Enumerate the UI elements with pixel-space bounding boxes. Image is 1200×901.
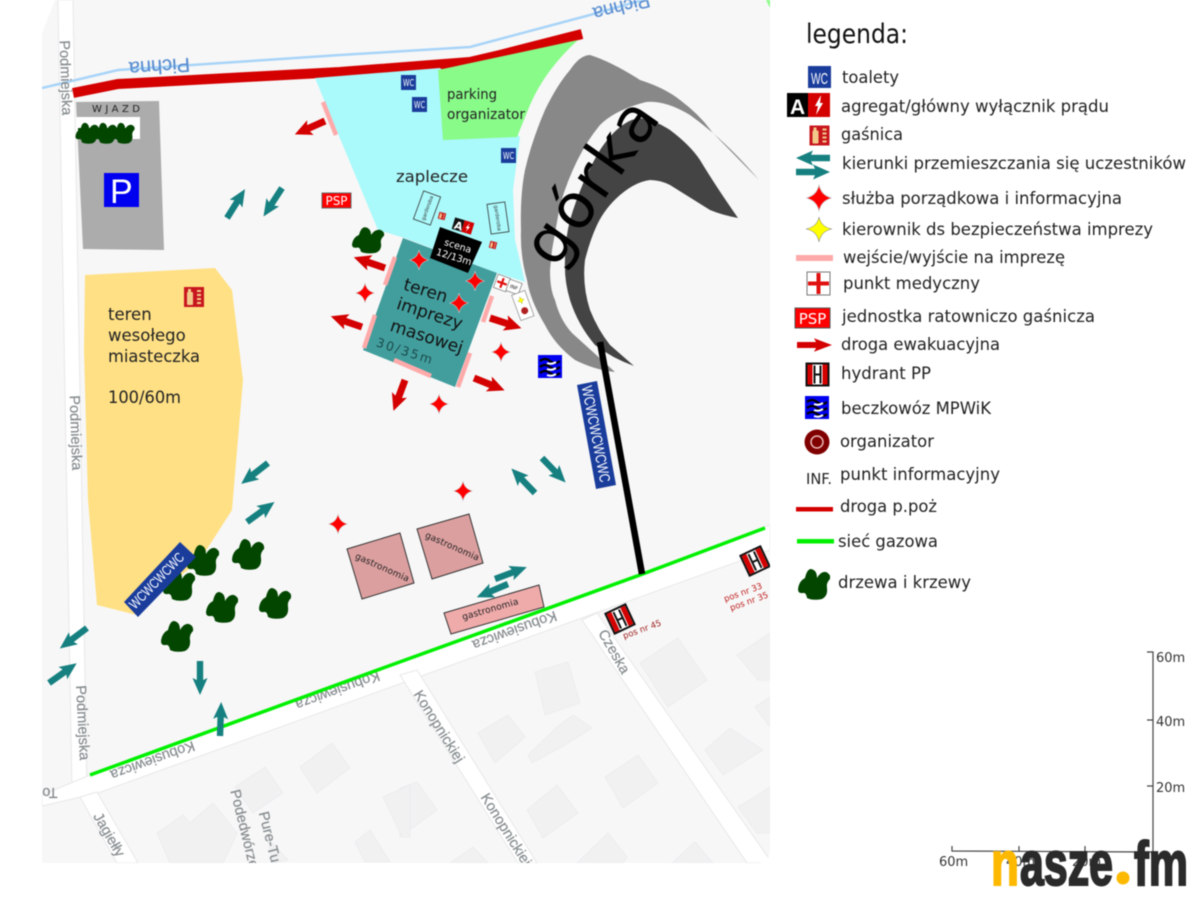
- parking P: [76, 101, 164, 250]
- teren imprezy masowej: masowej: [388, 316, 465, 358]
- road labels: To: [42, 784, 58, 800]
- road labels: Kobusiewicza: [292, 667, 382, 713]
- legend: organizator: organizator: [840, 432, 934, 451]
- hydrant pos 33/35: pos nr 35: [729, 591, 770, 614]
- garderoba right: garderoba: [492, 205, 502, 231]
- legend: toalety: toalety: [842, 68, 899, 87]
- legend: hydrant: [806, 362, 931, 386]
- medical and info point: INF: [509, 284, 519, 292]
- legend: gaśnica: [810, 125, 903, 146]
- zone: parking organizator: [438, 40, 578, 140]
- logo nasze.fm: n: [991, 830, 1019, 899]
- legend: PSP: PSP: [799, 310, 826, 328]
- map WC icons: WC: [503, 151, 514, 162]
- legend: droga p.poż: droga p.poż: [840, 497, 937, 516]
- generator on stage: [451, 217, 474, 237]
- legend: beczkowóz: [805, 396, 992, 419]
- service stars: [328, 250, 510, 534]
- legend: kierownik: kierownik ds bezpieczeństwa imprezy: [842, 220, 1153, 239]
- road labels: Podedwórze: [226, 788, 261, 870]
- legend: agregat: A: [790, 96, 805, 119]
- gastronomia stalls: [347, 514, 544, 634]
- parking organizator label: parking: [447, 87, 497, 103]
- legend: wejście: wejście/wyjście na imprezę: [843, 248, 1065, 267]
- evacuation arrows: [292, 114, 524, 414]
- wesołe miasteczko area: miasteczka: [108, 347, 200, 366]
- map WC icons: WC: [414, 100, 425, 111]
- legend: beczkowóz: beczkowóz MPWiK: [841, 399, 992, 418]
- teren imprezy masowej: [363, 238, 497, 387]
- legend: droga p.poż: [796, 497, 937, 516]
- stage: [430, 227, 482, 273]
- fleck at map corner: [766, 0, 770, 8]
- entrances: [323, 102, 492, 387]
- scale labels: 20m: [1156, 781, 1185, 796]
- legend: punkt informacyjny: punkt informacyjny: [840, 465, 1000, 484]
- legend: drzewa: drzewa i krzewy: [838, 573, 971, 592]
- road labels: Podmiejska: [56, 40, 74, 117]
- wesołe miasteczko area: [84, 268, 243, 615]
- long WC block right: WCWCWCWCWC: [578, 384, 613, 484]
- garderoba left: [413, 191, 441, 225]
- participant flow arrows: [45, 184, 571, 736]
- stage: scena: [443, 237, 473, 256]
- logo nasze.fm: asze: [1020, 830, 1113, 899]
- garderoba right: [487, 202, 509, 234]
- scale labels: 40m: [1156, 715, 1185, 730]
- manager and organizer box: [512, 290, 534, 321]
- legend: drzewa: [798, 569, 971, 600]
- legend: kierunki: kierunki przemieszczania się uczestników: [842, 154, 1186, 173]
- gastronomia stalls: gastronomia: [461, 597, 520, 623]
- legend: droga ewakuacyjna: droga ewakuacyjna: [841, 335, 1000, 354]
- road labels: Pure-Tu: [255, 810, 283, 864]
- generator on stage: A: [453, 219, 465, 234]
- roads: [70, 600, 768, 862]
- legend: agregat: [787, 93, 1109, 119]
- road labels: Pichna: [127, 53, 191, 79]
- legend: punkt informacyjny: [806, 465, 1000, 488]
- logo nasze.fm: .: [1115, 832, 1131, 894]
- legend: organizator: [804, 430, 934, 454]
- road labels: Kobusiewicza: [107, 737, 197, 783]
- legend: agregat: agregat/główny wyłącznik prądu: [841, 97, 1109, 116]
- hedge: [75, 123, 135, 144]
- buildings: [157, 633, 770, 863]
- road labels: Jagiełły: [89, 810, 128, 861]
- river Pichna: [42, 0, 660, 88]
- logo nasze.fm: [991, 830, 1188, 899]
- wesołe miasteczko area: teren: [108, 305, 152, 324]
- scale labels: 0: [1152, 855, 1160, 870]
- road labels: Konopnickiej: [477, 791, 534, 869]
- map extinguishers: [184, 212, 497, 307]
- hydrant pos 45: [604, 603, 663, 642]
- teren imprezy masowej: teren: [401, 275, 450, 307]
- legend: [787, 19, 1186, 600]
- trees: [161, 227, 384, 652]
- legend: PSP: jednostka ratowniczo gaśnicza: [841, 307, 1095, 326]
- zone: zaplecze: [315, 68, 525, 282]
- legend: sieć gazowa: sieć gazowa: [838, 532, 938, 551]
- legend: medyczny: [807, 272, 980, 295]
- gas line: [90, 528, 765, 775]
- map WC icons: WC: [403, 78, 414, 89]
- hydrant pos 33/35: pos nr 33: [723, 582, 764, 605]
- medical and info point: [493, 274, 522, 295]
- górka label: górka: [507, 84, 674, 279]
- wesołe miasteczko area: 100/60m: [108, 388, 181, 407]
- gastronomia stalls: gastronomia: [423, 531, 480, 564]
- garderoba left: garderoba: [421, 195, 435, 221]
- legend: służba: służba porządkowa i informacyjna: [842, 189, 1122, 208]
- legend: medyczny: punkt medyczny: [843, 274, 980, 293]
- parking P: WJAZD: [92, 104, 140, 115]
- scale labels: 60m: [1156, 651, 1185, 666]
- map WC icons: [401, 75, 516, 163]
- legend: kierownik: [806, 217, 1153, 242]
- fire road: [73, 34, 582, 93]
- legend: toalety: WC: [811, 71, 828, 88]
- scale labels: 20m: [1072, 855, 1101, 870]
- scale labels: 60m: [939, 855, 968, 870]
- road labels: Kobusiewicza: [469, 607, 559, 653]
- legend title: legenda:: [806, 19, 908, 50]
- stage: 12/13m: [435, 247, 473, 268]
- legend: służba: [806, 184, 1122, 212]
- scale labels: 40m: [1006, 855, 1035, 870]
- legend: gaśnica: gaśnica: [841, 125, 903, 144]
- road labels: Czeska: [594, 627, 633, 678]
- legend: kierunki: [796, 150, 1186, 180]
- map PSP: PSP: [325, 194, 348, 208]
- scale bar: [939, 651, 1185, 870]
- road labels: Podmiejska: [72, 685, 92, 762]
- water tanker: [538, 355, 562, 378]
- legend: toalety: [808, 66, 899, 88]
- long WC block left: WCWCWCWC: [126, 549, 187, 612]
- gastronomia stalls: gastronomia: [353, 552, 410, 585]
- hydrant pos 45: pos nr 45: [622, 619, 663, 642]
- black connector line: [600, 342, 642, 574]
- teren imprezy masowej: imprezy: [394, 294, 465, 334]
- road labels: Podmiejska: [66, 395, 84, 472]
- górka hill outer: [521, 55, 759, 372]
- wesołe miasteczko area: wesołego: [108, 326, 186, 345]
- road labels: Konopnickiej: [410, 688, 467, 766]
- parking organizator label: organizator: [447, 107, 525, 123]
- road labels: [42, 0, 652, 870]
- legend: hydrant: hydrant PP: [841, 364, 931, 383]
- hydrant pos 33/35: [723, 545, 771, 614]
- górka hill inner: [565, 118, 738, 366]
- legend: punkt informacyjny: INF.: [806, 470, 832, 488]
- teren imprezy masowej: 30/35m: [374, 335, 434, 367]
- parking P: P: [110, 173, 133, 211]
- scale labels: [939, 651, 1185, 870]
- map: [42, 0, 771, 870]
- zaplecze label: zaplecze: [396, 167, 468, 186]
